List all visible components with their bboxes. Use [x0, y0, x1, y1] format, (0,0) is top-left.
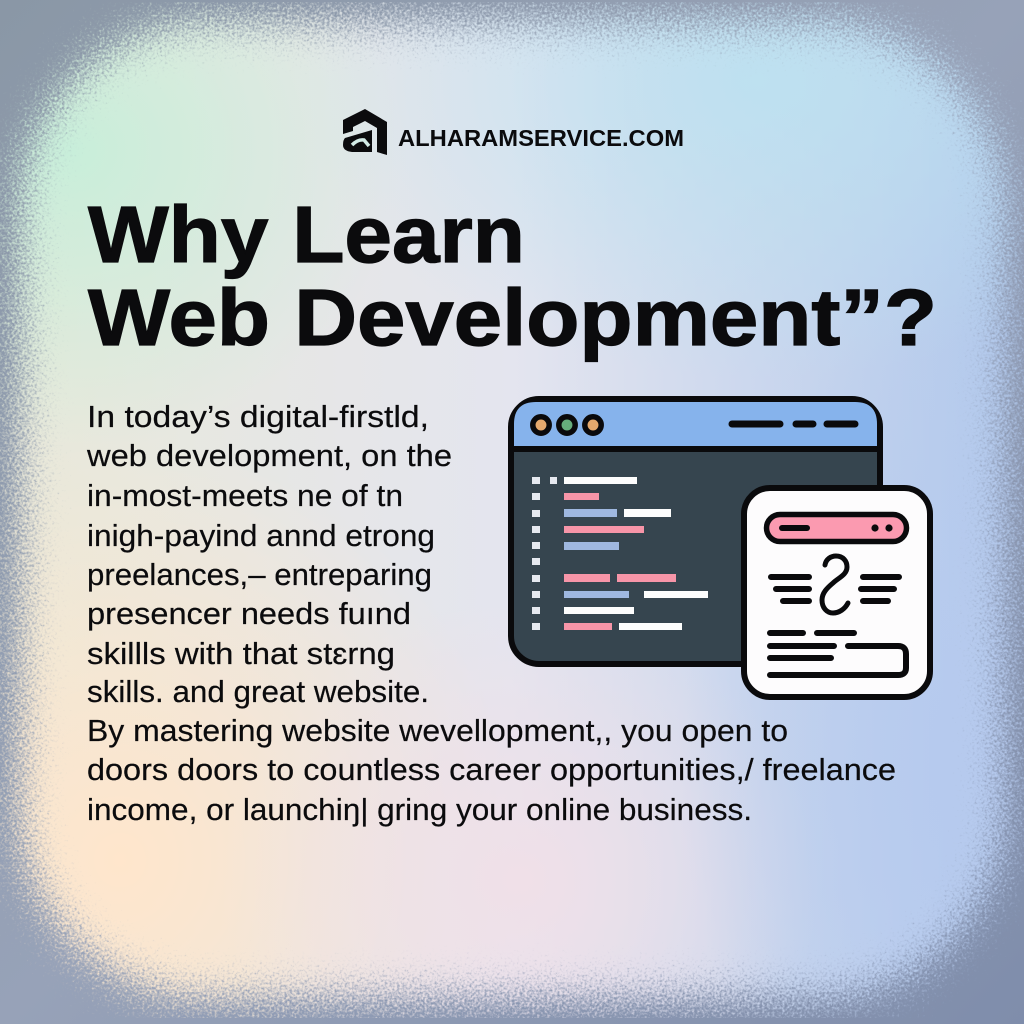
body text: By mastering website wevellopment,, you open to [87, 713, 788, 748]
window control dots [533, 417, 601, 433]
body text: in-most-meets ne of tn [87, 478, 403, 513]
body text [86, 399, 896, 827]
squiggle icon [822, 556, 848, 613]
title [88, 190, 937, 362]
code lines [532, 477, 708, 630]
browser window [511, 399, 880, 664]
icon: house logo [343, 109, 387, 155]
window title bar [514, 402, 877, 449]
title: Web Development”? [88, 273, 937, 362]
text lines [770, 577, 906, 675]
web page card [744, 488, 930, 697]
body text: preelances,– entreparing [87, 557, 432, 592]
body text: inigh-payind annd etrong [87, 518, 435, 553]
logo [343, 109, 684, 155]
body text: skillls with that stɛrng [87, 636, 395, 671]
body text: presencer needs fuınd [87, 596, 411, 631]
body text: doors doors to countless career opportunities,/ freelance [87, 752, 896, 787]
title: Why Learn [88, 190, 525, 279]
toolbar lines [732, 420, 855, 428]
illustration: code window and web page [511, 399, 930, 697]
logo text: ALHARAMSERVICE.COM [398, 125, 684, 151]
body text: web development, on the [86, 438, 452, 473]
body text: In today’s digital-firstld, [87, 399, 429, 434]
pink address bar [766, 514, 906, 542]
body text: income, or launchiŋ| gring your online business. [87, 792, 752, 827]
body text: skills. and great website. [87, 674, 429, 709]
